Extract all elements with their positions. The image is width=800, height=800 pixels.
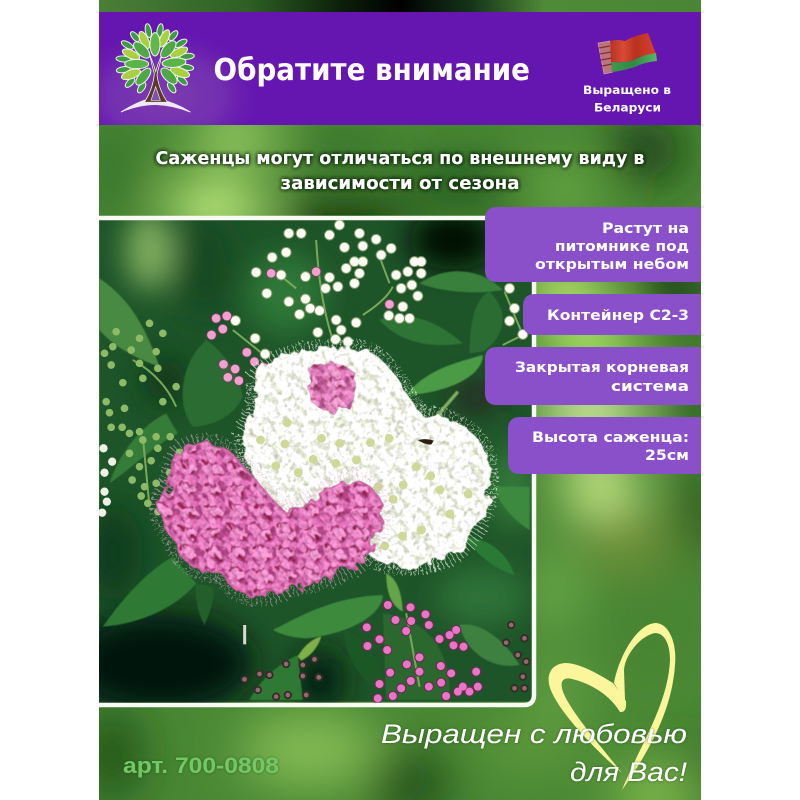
photo: magenta buds bbox=[367, 605, 478, 698]
photo: blurred foliage backdrop bbox=[99, 220, 532, 703]
infographic canvas bbox=[99, 0, 701, 800]
icon: Belarus flag bbox=[598, 33, 657, 74]
panel: container badge bbox=[523, 294, 701, 335]
article number: арт. 700-0808 bbox=[123, 753, 279, 778]
white cluster: flower centres bbox=[260, 423, 468, 546]
panel: nursery badge: Растут на bbox=[602, 221, 689, 237]
panel: photo of flowering spirea bbox=[99, 220, 532, 703]
tree: leaves bbox=[116, 23, 195, 94]
photo: green buds bbox=[102, 323, 179, 513]
photo: pink flower cluster bbox=[160, 444, 382, 596]
green bokeh background bbox=[82, 0, 719, 800]
slogan: Выращен с любовью bbox=[381, 719, 687, 749]
slogan bbox=[381, 719, 688, 787]
icon: tree logo bbox=[116, 23, 195, 112]
panel: root system badge bbox=[485, 347, 701, 405]
flag caption: Беларуси bbox=[594, 100, 661, 114]
panel: height badge: Высота саженца: bbox=[532, 430, 689, 446]
panel: height badge: 25см bbox=[645, 448, 689, 464]
slogan: для Вас! bbox=[570, 757, 688, 787]
panel: header band bbox=[99, 12, 701, 125]
subtitle note bbox=[156, 148, 644, 194]
icon: yellow heart bbox=[549, 623, 675, 790]
photo: small white mark bbox=[243, 625, 246, 644]
photo: dark buds bbox=[244, 625, 526, 697]
photo: pale pink buds bbox=[211, 272, 389, 381]
subtitle note: зависимости от сезона bbox=[280, 173, 520, 194]
title: Обратите внимание bbox=[214, 53, 530, 88]
panel: root system badge: система bbox=[611, 379, 689, 395]
panel: height badge bbox=[508, 417, 701, 474]
flag caption: Выращено в bbox=[583, 83, 671, 97]
panel: container badge: Контейнер С2-3 bbox=[547, 308, 689, 324]
subtitle note: Саженцы могут отличаться по внешнему виду в bbox=[156, 148, 644, 169]
panel: root system badge: Закрытая корневая bbox=[515, 360, 689, 376]
tree: roots and trunk bbox=[121, 54, 190, 112]
panel: nursery badge: питомнике под bbox=[555, 239, 689, 255]
photo: flower stems bbox=[133, 240, 523, 687]
photo: leaves bbox=[100, 271, 529, 700]
flag caption bbox=[583, 83, 671, 114]
photo: white flower cluster bbox=[246, 351, 487, 563]
panel: nursery badge: открытым небом bbox=[535, 257, 689, 273]
photo: white buds bbox=[235, 225, 523, 369]
photo frame bbox=[99, 218, 534, 705]
panel: nursery badge bbox=[485, 207, 701, 282]
